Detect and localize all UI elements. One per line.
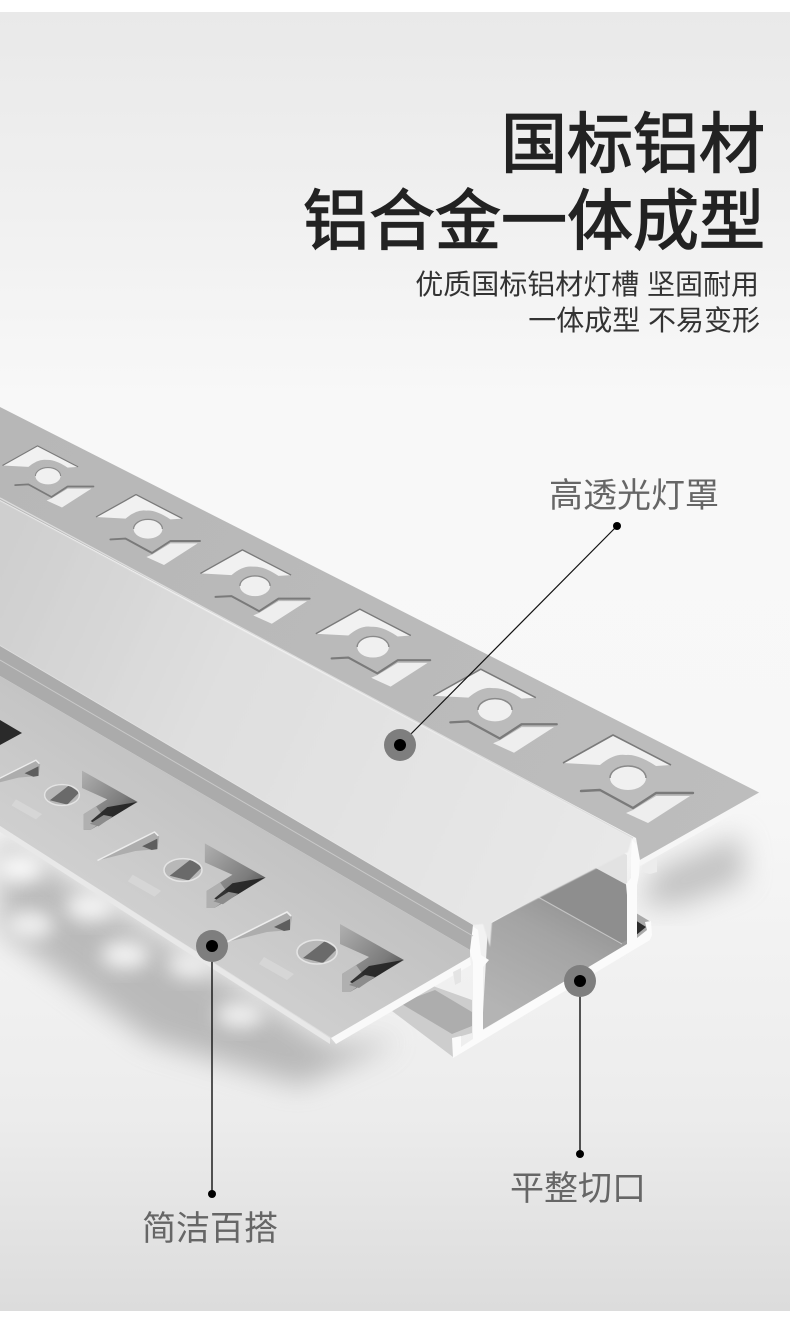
channel interior — [482, 866, 632, 1030]
aluminium channel profile — [0, 407, 761, 1058]
right foot hook — [636, 913, 651, 940]
callout: 高透光灯罩 — [384, 477, 719, 761]
subtitle: 一体成型 不易变形 — [528, 305, 760, 336]
upper flange cut-outs — [3, 446, 693, 823]
white cut profile section — [452, 840, 652, 1058]
callout: 高透光灯罩: 高透光灯罩 — [549, 477, 719, 515]
title: 国标铝材: 国标铝材 — [501, 107, 765, 181]
lower flange cut-outs — [0, 720, 404, 992]
subtitle: 优质国标铝材灯槽 坚固耐用 — [415, 269, 759, 300]
upper flange — [0, 407, 760, 860]
lower rail foot — [388, 985, 472, 1057]
cast shadow under profile — [0, 835, 745, 1085]
callout: 平整切口 — [510, 965, 646, 1208]
title: 铝合金一体成型: 铝合金一体成型 — [303, 184, 765, 258]
callout: 简洁百搭 — [142, 930, 278, 1248]
lower flange — [0, 676, 470, 1040]
subtitle — [415, 269, 760, 336]
callout: 简洁百搭: 简洁百搭 — [142, 1210, 278, 1248]
frosted lens cover — [0, 490, 632, 947]
callout: 平整切口: 平整切口 — [510, 1170, 646, 1208]
lower flange rail — [0, 646, 473, 950]
